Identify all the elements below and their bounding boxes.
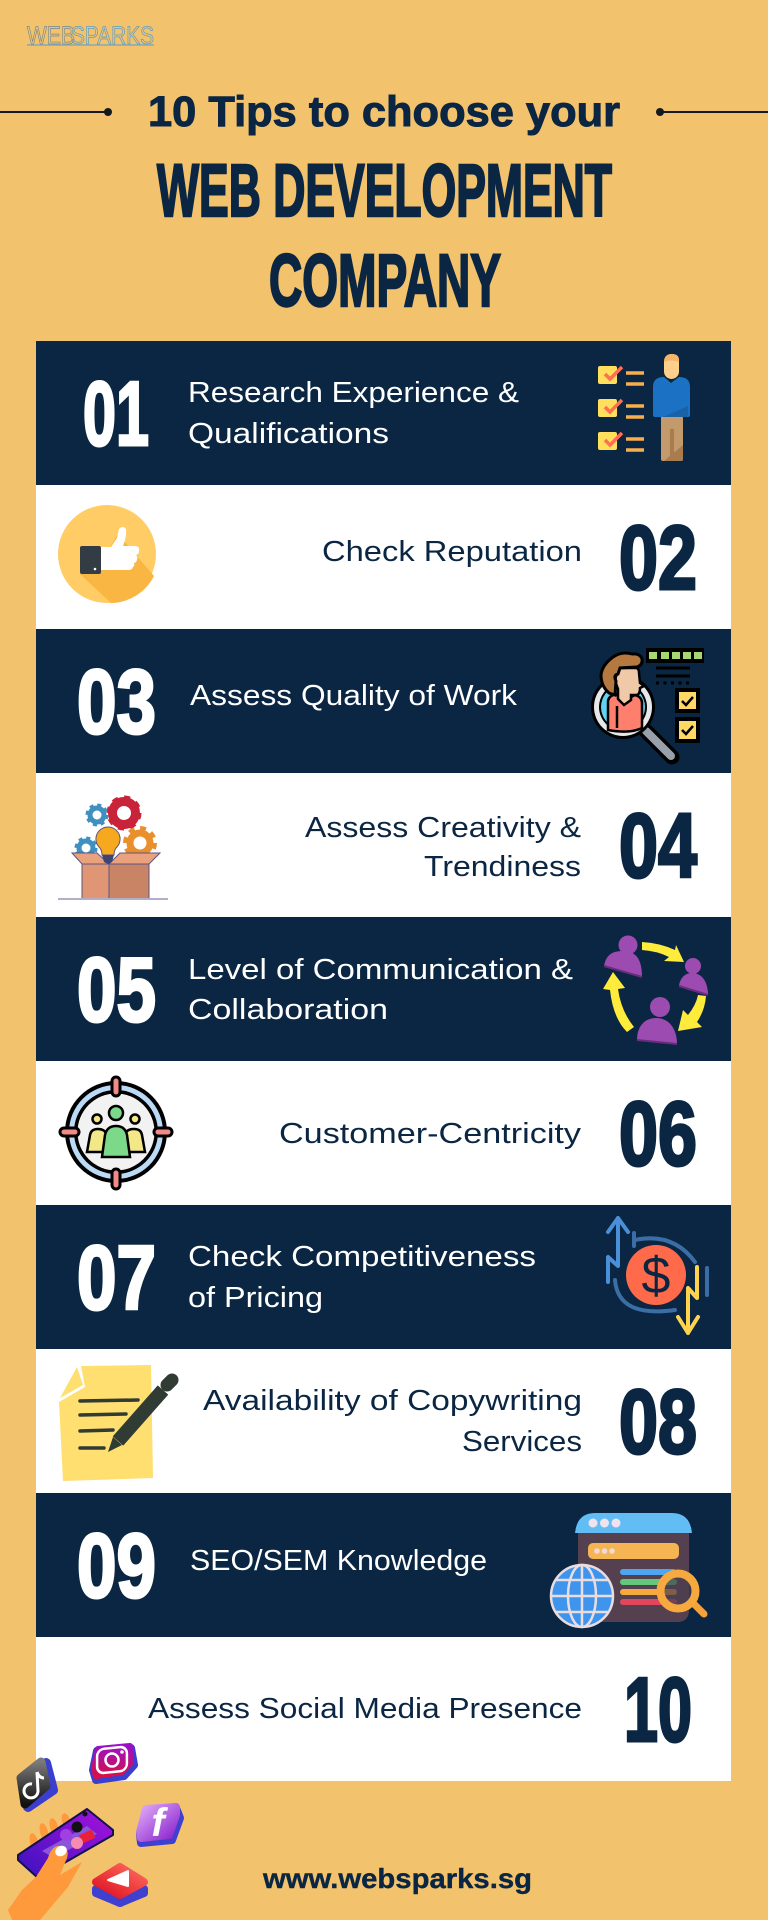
panel: tip 03: Assess Quality of Work — [190, 680, 518, 712]
icon: browser window with globe and magnifier — [551, 1513, 704, 1627]
logo: WEB — [27, 22, 75, 50]
title — [148, 88, 620, 322]
panel: tip 10: Assess Social Media Presence — [148, 1693, 582, 1725]
icon: play tile — [96, 1867, 144, 1903]
panel: tip 01 — [36, 341, 731, 485]
panel: tip 04: Trendiness — [424, 851, 581, 883]
panel: tip 03: 03 — [77, 652, 156, 753]
panel: tip 08: Availability of Copywriting — [203, 1385, 582, 1417]
icon: paper and pen — [59, 1365, 172, 1481]
icon: pricing arrows and dollar: $ — [642, 1247, 671, 1305]
icon: instagram tile — [93, 1746, 134, 1780]
panel: tip 06: Customer-Centricity — [279, 1118, 582, 1150]
panel: tip 05: Collaboration — [188, 994, 388, 1026]
panel: tip 07: of Pricing — [188, 1282, 323, 1314]
panel: tip 10: 10 — [624, 1660, 692, 1761]
icon: f tile: f — [151, 1801, 168, 1845]
website url: www.websparks.sg — [262, 1863, 532, 1894]
icon: hand holding phone — [8, 1809, 113, 1920]
panel: tip 05: Level of Communication & — [188, 954, 573, 986]
panel: tip 06: 06 — [619, 1084, 697, 1185]
panel: tip 02 — [36, 485, 731, 629]
icon: people cycle with arrows — [603, 936, 708, 1044]
panel: tip 10 — [36, 1637, 731, 1781]
panel: tip 04: 04 — [619, 796, 697, 897]
icon: magnifier over person with checklist — [591, 648, 704, 757]
title decoration: right line — [656, 108, 768, 116]
title decoration: left line — [0, 108, 112, 116]
panel: tip 01: Research Experience & — [188, 377, 519, 409]
panel: tip 07 — [36, 1205, 731, 1349]
logo — [27, 22, 154, 50]
panel: tip 07: Check Competitiveness — [188, 1241, 536, 1273]
panel: tip 07: 07 — [77, 1228, 156, 1329]
panel: tip 04 — [36, 773, 731, 917]
title: 10 Tips to choose your — [148, 88, 620, 136]
panel: tip 06 — [36, 1061, 731, 1205]
panel: tip 08: Services — [462, 1426, 582, 1458]
icon: f tile — [140, 1801, 180, 1845]
panel: tip 01: Qualifications — [188, 418, 389, 450]
panel: tip 08 — [36, 1349, 731, 1493]
icon: social media apps and phone in hand — [8, 1746, 180, 1920]
panel: tip 09 — [36, 1493, 731, 1637]
icon: checklist and person — [598, 354, 690, 461]
panel: tip 09: 09 — [77, 1516, 156, 1617]
icon: box with gears and light bulb — [58, 798, 168, 899]
panel: tip 09: SEO/SEM Knowledge — [190, 1545, 487, 1577]
panel: tip 03 — [36, 629, 731, 773]
panel: tip 05 — [36, 917, 731, 1061]
panel: tip 04: Assess Creativity & — [305, 812, 581, 844]
panel: tip 02: Check Reputation — [322, 536, 582, 568]
panel: tip 02: 02 — [619, 508, 697, 609]
icon: tiktok tile — [21, 1762, 53, 1807]
icon: pricing arrows and dollar — [608, 1218, 707, 1333]
logo: SPARKS — [71, 22, 154, 50]
title: COMPANY — [269, 239, 501, 322]
panel: tip 08: 08 — [619, 1372, 697, 1473]
icon: thumbs up — [58, 505, 156, 603]
panel: tip 01: 01 — [83, 364, 149, 465]
icon: customer target — [64, 1081, 168, 1185]
panel: tip 05: 05 — [77, 940, 156, 1041]
